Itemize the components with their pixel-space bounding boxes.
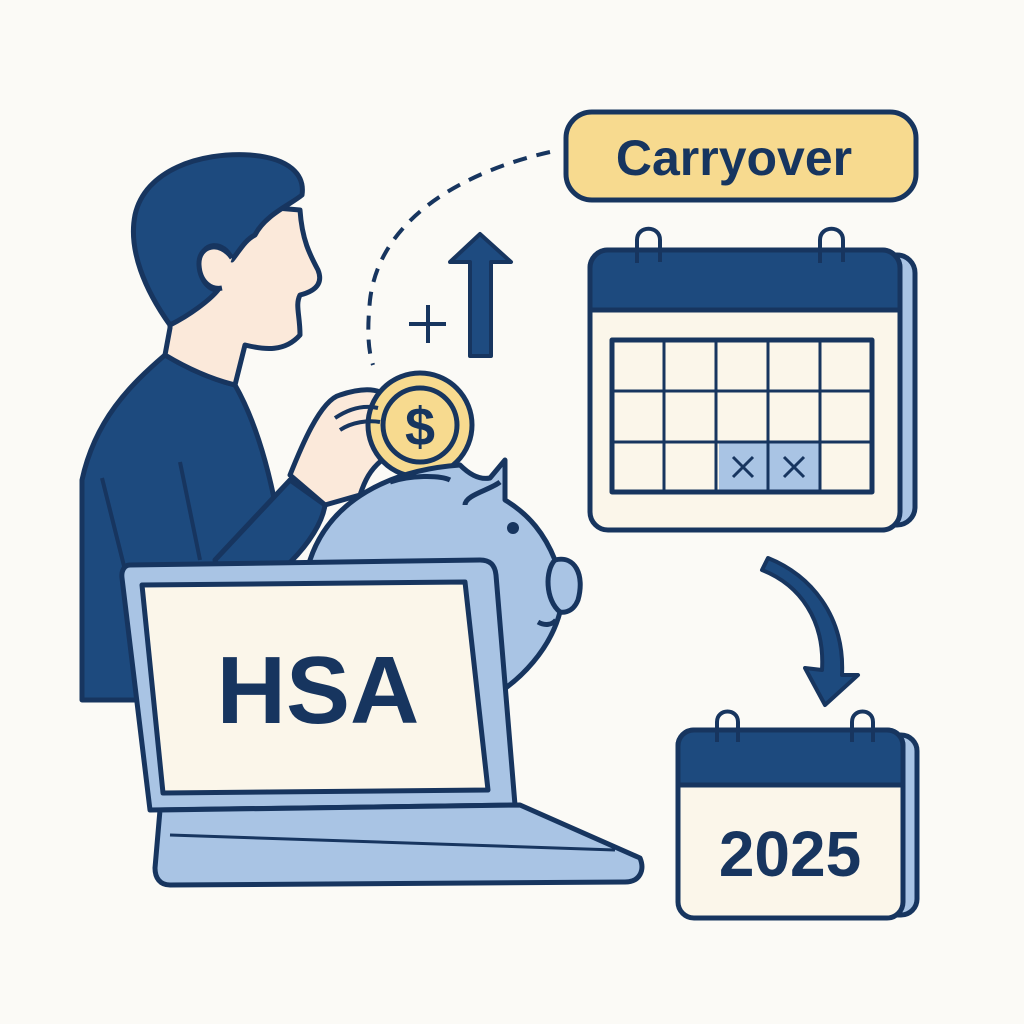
ear xyxy=(199,247,232,288)
curved arrow xyxy=(762,558,858,705)
shirt xyxy=(82,355,300,700)
hair xyxy=(133,155,302,325)
small calendar 2025: 2025 xyxy=(719,818,861,890)
finger lines xyxy=(335,407,380,430)
coin: $ xyxy=(405,397,435,457)
hand xyxy=(290,390,382,505)
laptop: HSA xyxy=(217,637,419,744)
base xyxy=(155,805,642,885)
small calendar 2025 xyxy=(678,712,917,918)
screen xyxy=(122,560,515,810)
plus sign xyxy=(409,305,446,343)
coin xyxy=(368,373,472,477)
person xyxy=(82,155,382,700)
up arrow xyxy=(450,234,511,356)
laptop xyxy=(122,560,642,885)
piggy bank xyxy=(300,460,580,695)
carryover label xyxy=(566,112,916,200)
shirt fold lines xyxy=(102,462,200,570)
grid xyxy=(719,442,821,492)
big calendar xyxy=(590,229,915,530)
dashed connector xyxy=(368,152,550,365)
neck and face xyxy=(165,205,320,385)
sleeve xyxy=(215,480,325,600)
carryover label: Carryover xyxy=(616,130,852,186)
